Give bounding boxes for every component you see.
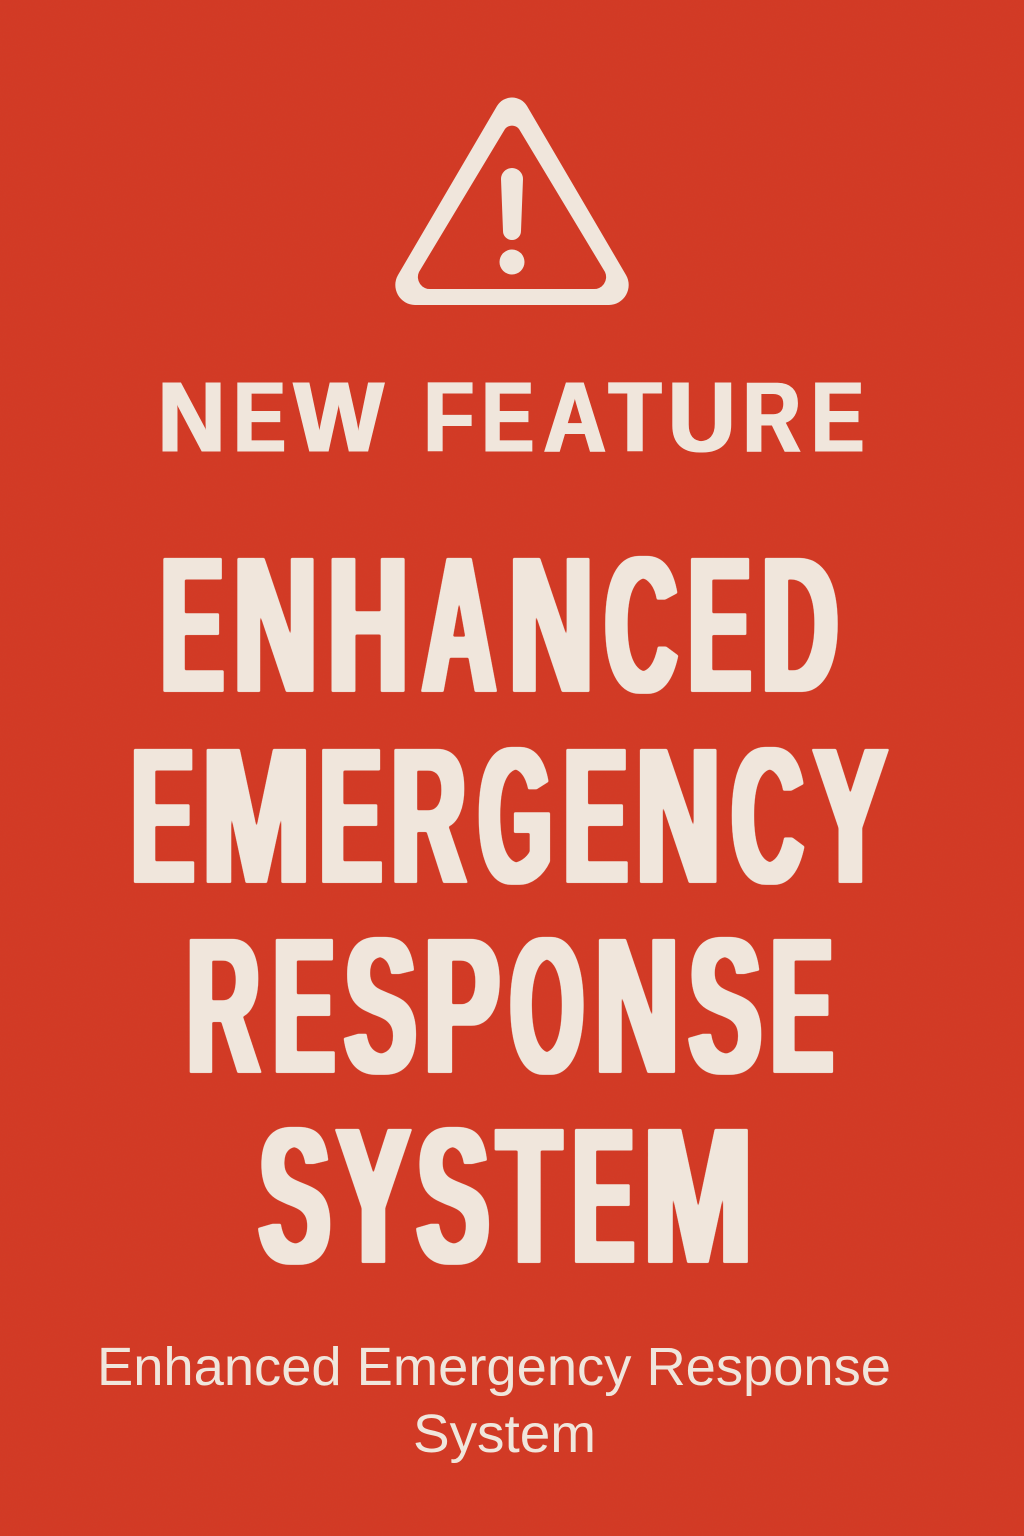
main title: E bbox=[132, 707, 194, 925]
main title: E bbox=[274, 897, 334, 1115]
main title: R bbox=[391, 707, 466, 925]
subtitle: System bbox=[413, 1404, 596, 1464]
main title: E bbox=[320, 707, 382, 925]
main title bbox=[132, 516, 887, 1305]
main title: H bbox=[328, 516, 408, 734]
main title: M bbox=[202, 707, 311, 925]
eyebrow: new feature: E bbox=[482, 362, 534, 474]
eyebrow: new feature: E bbox=[811, 362, 864, 474]
main title: A bbox=[422, 516, 496, 734]
eyebrow: new feature: N bbox=[158, 362, 225, 474]
main title: N bbox=[509, 516, 593, 734]
main title: S bbox=[259, 1087, 330, 1305]
main title: C bbox=[605, 516, 677, 734]
eyebrow: new feature: E bbox=[234, 362, 286, 474]
main title: E bbox=[771, 897, 833, 1115]
main title: Y bbox=[337, 1087, 410, 1305]
subtitle bbox=[97, 1337, 891, 1464]
eyebrow: new feature: U bbox=[668, 362, 735, 474]
main title: T bbox=[497, 1087, 561, 1305]
eyebrow: new feature: F bbox=[424, 362, 474, 474]
eyebrow: new feature: R bbox=[743, 362, 801, 474]
eyebrow: new feature: W bbox=[294, 362, 384, 474]
main title: S bbox=[344, 897, 416, 1115]
main title: S bbox=[689, 897, 762, 1115]
main title: O bbox=[510, 897, 584, 1115]
main title: N bbox=[595, 897, 679, 1115]
main title: E bbox=[564, 707, 628, 925]
main title: E bbox=[573, 1087, 634, 1305]
main title: M bbox=[643, 1087, 753, 1305]
main title: D bbox=[762, 516, 838, 734]
main title: E bbox=[689, 516, 751, 734]
main title: R bbox=[187, 897, 260, 1115]
main title: E bbox=[161, 516, 223, 734]
main title: G bbox=[479, 707, 552, 925]
subtitle: Enhanced Emergency Response bbox=[97, 1337, 891, 1397]
main title: N bbox=[234, 516, 317, 734]
eyebrow: new feature: A bbox=[544, 362, 606, 474]
main title: S bbox=[417, 1087, 489, 1305]
main title: C bbox=[732, 707, 803, 925]
eyebrow: new feature: T bbox=[609, 362, 661, 474]
icon: warning triangle bbox=[395, 98, 629, 305]
main title: N bbox=[636, 707, 720, 925]
main title: P bbox=[424, 897, 500, 1115]
main title: Y bbox=[814, 707, 887, 925]
